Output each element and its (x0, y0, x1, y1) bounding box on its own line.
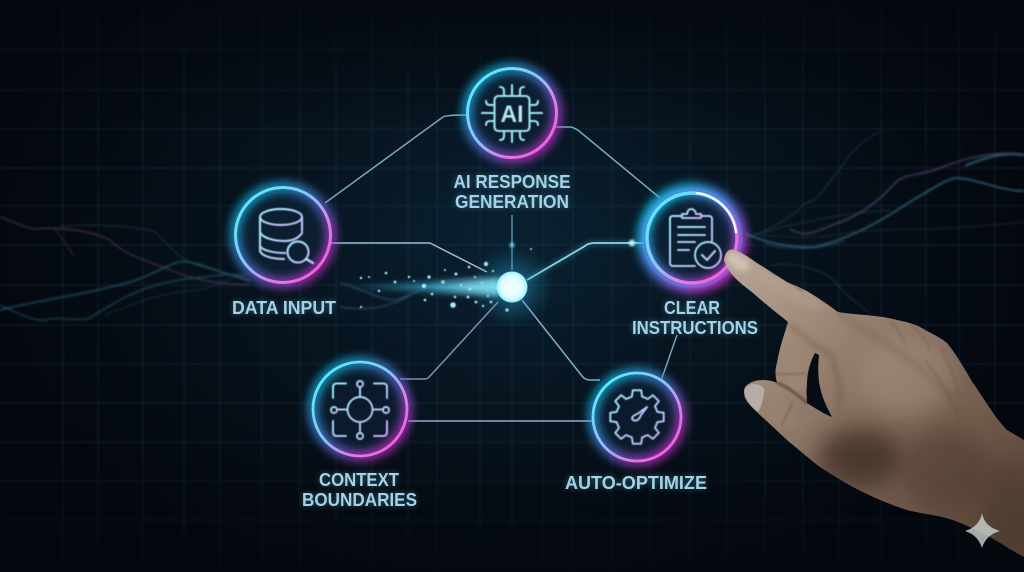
ring (236, 188, 330, 282)
icon: database with magnifier (260, 209, 313, 263)
label: AI response generation: AI RESPONSE (454, 172, 570, 192)
ring (313, 362, 407, 456)
connector: hub to auto-optimize (522, 300, 600, 380)
connector: data input to hub (331, 243, 487, 272)
glow (313, 362, 407, 456)
glow (644, 190, 740, 286)
connector: data input to AI response (325, 115, 467, 203)
disc (467, 68, 557, 158)
light streak (330, 278, 500, 296)
bright arc (696, 193, 736, 233)
thumb nail (745, 384, 764, 412)
icon: gear with gauge needle (610, 390, 664, 444)
node: clear instructions (644, 190, 740, 286)
node: AI response generation (467, 68, 557, 158)
icon: clipboard with check (670, 209, 721, 268)
node: auto-optimize (593, 373, 681, 461)
label: clear instructions (632, 298, 758, 338)
connector: context boundaries to auto-optimize (408, 420, 593, 422)
hand silhouette (724, 249, 1024, 557)
hub orb (496, 272, 528, 302)
label: context boundaries: BOUNDARIES (302, 490, 417, 510)
right data waves (745, 132, 1024, 313)
disc (313, 362, 407, 456)
connector: hub to clear instructions (527, 240, 644, 280)
label: context boundaries: CONTEXT (319, 470, 399, 490)
knuckle creases (891, 323, 933, 370)
label: AI response generation: GENERATION (455, 192, 569, 212)
bottom fade (0, 440, 1024, 572)
node: context boundaries (313, 362, 407, 456)
label: context boundaries (302, 470, 417, 510)
glow (593, 373, 681, 461)
ring (468, 68, 556, 158)
central hub with particle stream (330, 245, 554, 329)
gap between curled fingers (807, 353, 832, 417)
left data waves (0, 217, 255, 320)
particles (360, 248, 532, 312)
outer ring (644, 190, 740, 286)
label: data input: DATA INPUT (232, 298, 336, 318)
hub halo (470, 245, 554, 329)
glow (467, 68, 557, 158)
glow (235, 187, 331, 283)
disc (645, 191, 739, 285)
connector lines (325, 115, 677, 421)
connector: AI response label to hub (510, 215, 514, 270)
light streak core (385, 284, 500, 290)
hand pointing at clear instructions (723, 249, 1024, 560)
icon: AI chip: AI (500, 101, 524, 128)
connector: AI response to clear instructions (556, 127, 660, 198)
hand shading (723, 249, 1024, 560)
ring (647, 193, 737, 283)
disc (593, 373, 681, 461)
connector: hub to context boundaries (400, 302, 498, 379)
connector: auto-optimize to clear instructions (662, 335, 677, 378)
label: AI response generation (454, 172, 570, 212)
label: auto-optimize: AUTO-OPTIMIZE (565, 473, 707, 493)
label: clear instructions: INSTRUCTIONS (632, 318, 758, 338)
disc (235, 187, 331, 283)
top fade (0, 0, 1024, 130)
ring (593, 373, 681, 461)
icon: context network (331, 381, 389, 439)
icon: sparkle watermark (965, 513, 1000, 548)
stream wisps (340, 278, 487, 309)
label: clear instructions: CLEAR (664, 298, 720, 318)
fingertip highlight (726, 252, 750, 273)
node: data input (235, 187, 331, 283)
